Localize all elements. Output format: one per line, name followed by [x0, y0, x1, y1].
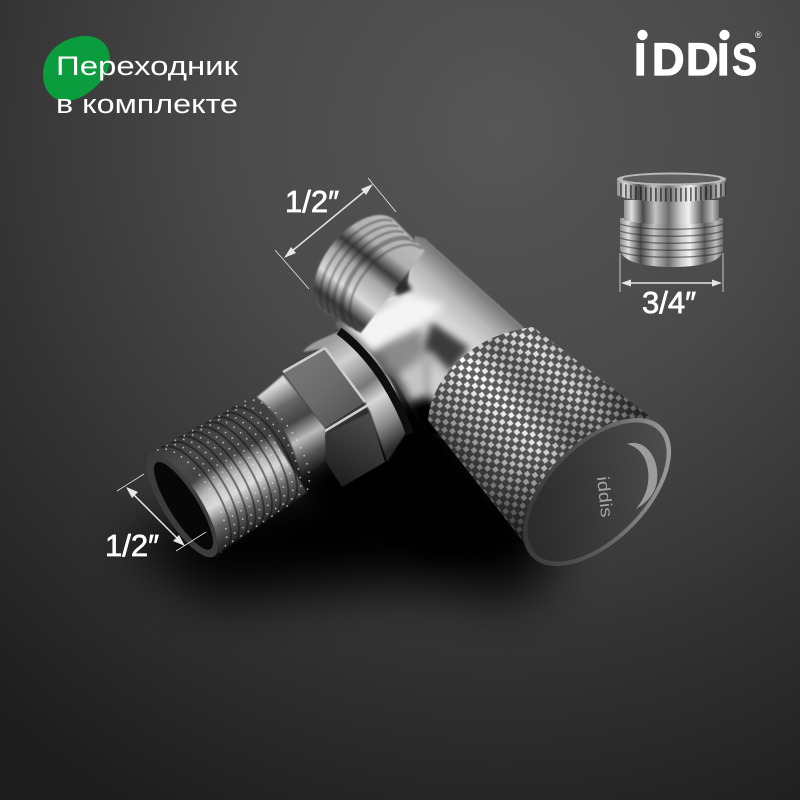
logo letter S: S [732, 34, 757, 85]
knob end rim [497, 392, 697, 592]
fitting: collar and black ring [303, 331, 410, 462]
nut lower face [325, 412, 385, 487]
adapter bore [622, 174, 720, 184]
knob end face [503, 398, 691, 586]
iddis logo [634, 30, 762, 85]
fitting: hex nut [283, 348, 385, 487]
thread ridges [161, 393, 313, 550]
green blob [43, 36, 110, 101]
logo dot [637, 30, 648, 40]
dimension: 3/4 inch [620, 253, 723, 292]
adapter knurled ring [617, 179, 726, 202]
adapter thread ridges [620, 224, 723, 257]
fitting: T body and upper tube [335, 236, 545, 450]
thread rim [134, 445, 230, 566]
heading: adapter included: Переходник [56, 51, 238, 81]
dimension: upper 1/2 inch [275, 178, 396, 289]
nut bright edges [283, 348, 368, 431]
fitting: lower thread [134, 385, 326, 566]
black ring [339, 331, 410, 434]
body shading [345, 264, 470, 440]
label: lower 1/2 inch: 1/2″ [105, 528, 159, 563]
adapter thread [620, 218, 723, 267]
arrowheads [621, 280, 722, 286]
adapter rim [617, 172, 726, 186]
adapter neck [624, 200, 719, 224]
logo dot [719, 30, 730, 40]
label: 3/4 inch: 3/4″ [642, 285, 696, 320]
thread opening [145, 455, 222, 557]
arrowheads [284, 184, 373, 258]
dimension: lower 1/2 inch [117, 474, 206, 551]
label: upper 1/2 inch: 1/2″ [285, 184, 339, 219]
adapter [617, 172, 726, 267]
shadow under fitting [120, 380, 560, 600]
fitting: knurled knob [428, 327, 671, 566]
registered mark: ® [755, 30, 762, 40]
logo text on knob: iddis [593, 475, 616, 518]
heading: second line: в комплекте [56, 89, 238, 119]
fitting: upper thread [296, 199, 428, 338]
iddis logo: IDDI [634, 34, 730, 85]
adapter knurling [617, 182, 726, 202]
thread ridges [304, 206, 424, 334]
fitting: neck before nut [257, 375, 328, 481]
thread highlight patch [188, 443, 280, 522]
logo crescent on knob [627, 443, 657, 509]
thread highlights [157, 385, 326, 552]
arrowheads [126, 487, 185, 546]
